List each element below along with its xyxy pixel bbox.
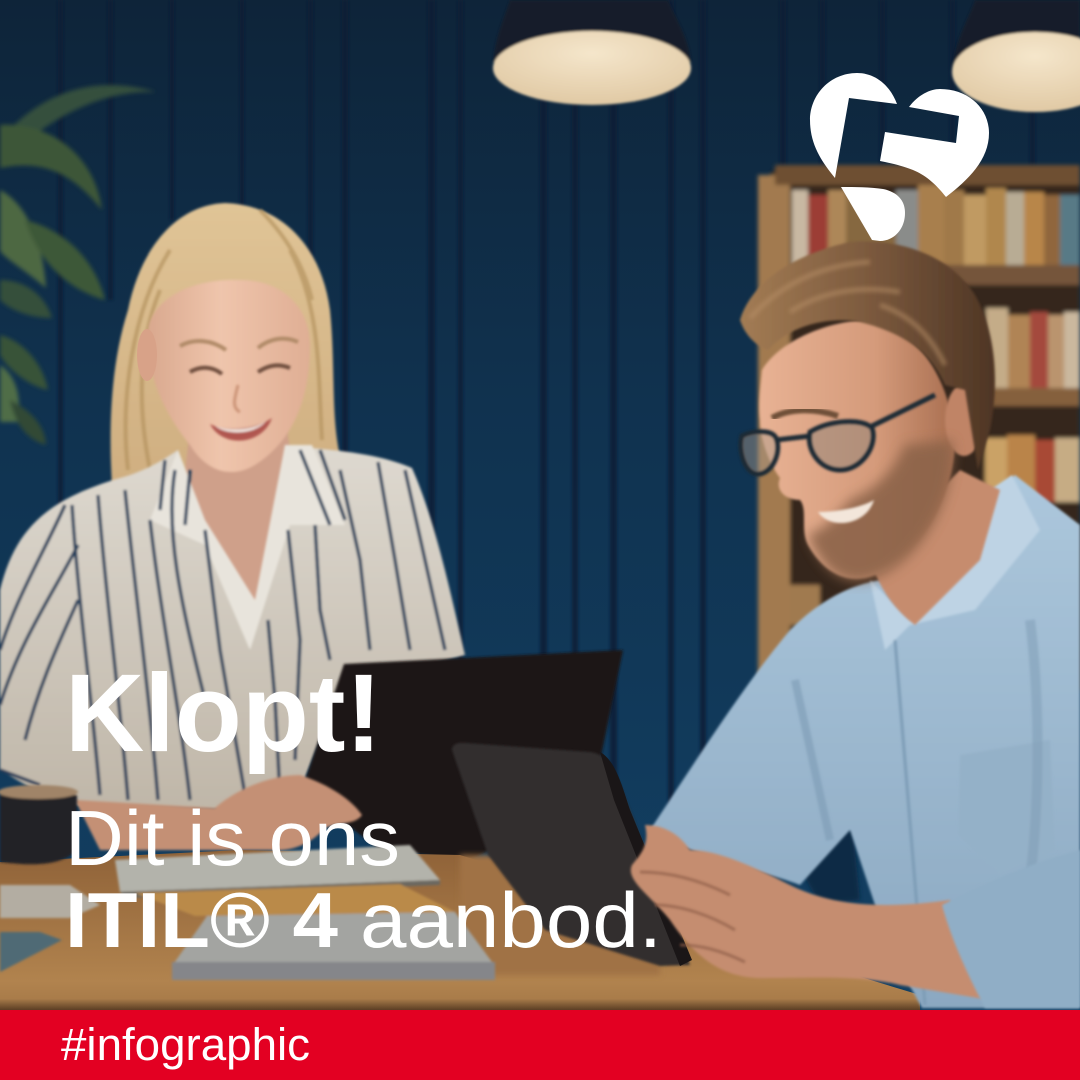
- heading: Klopt!: Klopt!: [65, 652, 382, 775]
- man: face: [759, 320, 955, 579]
- table: [0, 850, 920, 1010]
- man: gap behind arm: [790, 800, 860, 905]
- woman: hair: [111, 203, 342, 490]
- logo: left piece: [810, 73, 897, 178]
- man: smile: [818, 500, 874, 523]
- woman: eyes, mouth: [180, 339, 298, 441]
- subheading: ITIL 4 aanbod: [65, 876, 662, 964]
- footer bar: [0, 1010, 1080, 1080]
- man: shirt: [650, 475, 1080, 1008]
- man: collar and placket: [795, 475, 1055, 1005]
- man: ear: [945, 384, 983, 456]
- man: neck: [870, 470, 1000, 625]
- man: [631, 241, 1080, 1008]
- pendant lamp: centre: [493, 0, 691, 105]
- man: eyebrow: [772, 410, 838, 418]
- man: beard: [808, 440, 953, 582]
- logo: lower piece: [841, 187, 905, 241]
- front tablet: [452, 743, 690, 966]
- logo: right piece: [880, 89, 989, 197]
- woman: striped shirt: [0, 445, 465, 810]
- back laptop: [302, 650, 623, 860]
- woman: neck and chest: [182, 420, 300, 655]
- subheading: ITIL 4 aanbod: aanbod.: [360, 876, 662, 964]
- bookshelf: [758, 165, 1080, 690]
- pendant lamp: right: [952, 0, 1080, 112]
- man: hair: [740, 241, 995, 470]
- woman: face: [148, 280, 310, 472]
- plant: [0, 85, 156, 445]
- hashtag label: #infographic: [61, 1019, 310, 1070]
- man: hand and forearm: [631, 825, 990, 1000]
- mug: [0, 785, 78, 864]
- man: glasses: [741, 395, 935, 474]
- woman: forearm and hand: [75, 775, 362, 850]
- notebooks on table: [0, 845, 495, 980]
- logo: white heart mark: [810, 73, 989, 241]
- woman: [0, 203, 465, 810]
- subheading: ITIL 4 aanbod: ITIL® 4: [65, 876, 338, 964]
- man: sleeve cuff: [942, 850, 1080, 1008]
- subheading: Dit is ons: Dit is ons: [65, 794, 400, 882]
